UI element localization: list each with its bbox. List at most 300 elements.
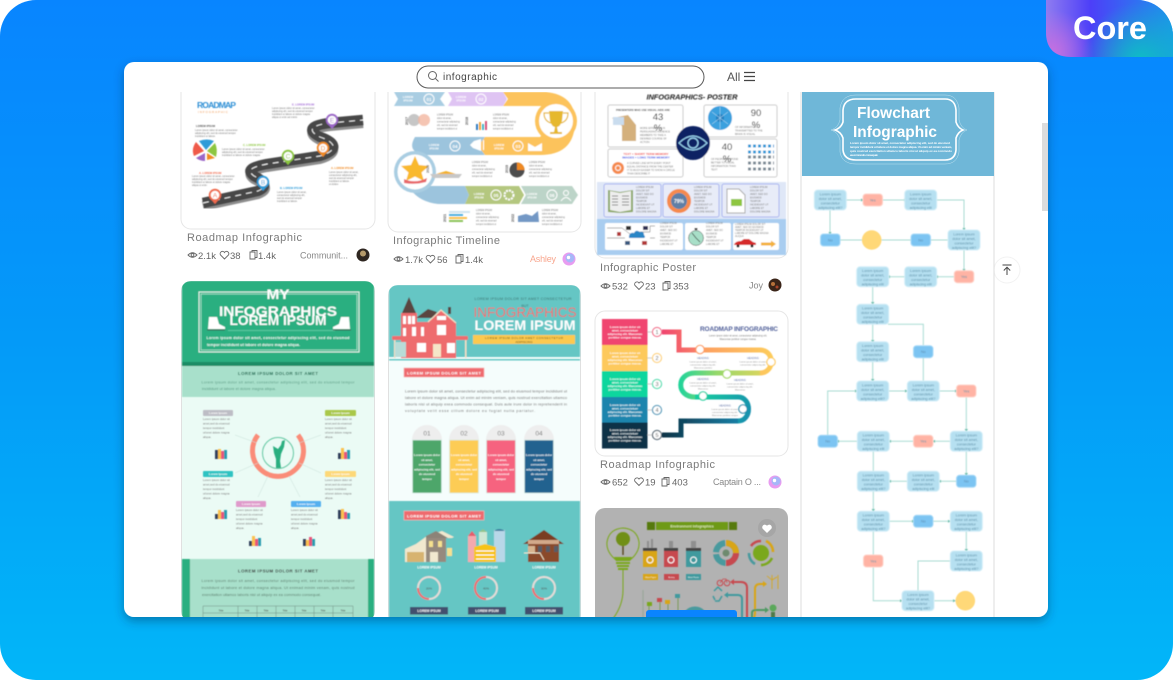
card: green skating infographic: MY <box>266 286 290 302</box>
card: Infographic Timeline: dolor sit amet, <box>437 117 452 120</box>
card: Roadmap Infographic road: E. LOREM IPSUM <box>292 102 315 106</box>
flowchart title frame: Flowchart <box>857 105 931 122</box>
flowchart diagram: consectetur <box>914 392 934 396</box>
flowchart diagram: Yes <box>920 440 926 444</box>
flowchart diagram: adipiscing elit <box>862 358 884 362</box>
card: teal house infographic: voluptate velit esse cillum dolore eu fugiat nulla pariatur. <box>405 409 535 413</box>
card caption: Roadmap Infographic stack: 19 <box>645 478 656 488</box>
card caption: Infographic Timeline: Ashley <box>530 254 556 264</box>
card: green skating infographic: amet,sed do eiusmod <box>325 422 352 426</box>
flowchart diagram: dolor sit amet, <box>862 478 885 482</box>
card: Infographic Poster <box>594 92 788 258</box>
card: teal house infographic: sit amet, <box>458 458 470 462</box>
card: Infographic Poster: LOREM IPSUM <box>660 222 677 225</box>
card: Infographic Poster: LABORE ET <box>636 207 651 210</box>
card: Infographic Timeline: elit, sed do eiusmod <box>437 124 458 127</box>
flowchart diagram: No <box>825 440 830 444</box>
card: green skating infographic: Lorem ipsum dolor sit amet, consectetur adipiscing elit, sed do eiusmod tempor <box>202 579 355 583</box>
card: Infographic Poster: EIUSMOD <box>636 196 648 200</box>
card: Roadmap Infographic stack: Lorem ipsum dolor sit amet, consectetur adipiscing elit. <box>709 334 767 338</box>
filter menu: All <box>727 70 755 84</box>
flowchart diagram: Lorem ipsum <box>913 474 934 478</box>
flowchart diagram: Lorem ipsum <box>956 434 977 438</box>
card: Infographic Poster: EIUSMOD <box>694 196 706 200</box>
card: green skating infographic: Lorem Ipsum <box>209 411 228 415</box>
card: Roadmap Infographic stack: amet, consectetuer <box>612 406 639 410</box>
card: Infographic Timeline: tempor incididunt ut <box>437 128 457 130</box>
card: Infographic Poster: DOLOR SIT <box>636 190 650 192</box>
card: Infographic Timeline: LOREM IPSUM <box>542 210 558 212</box>
card: Roadmap Infographic stack: amet, consectetuer <box>612 328 639 332</box>
card: Roadmap Infographic stack: adipiscing elit. Maecenas <box>608 358 643 362</box>
card: Roadmap Infographic road: incididunt ut labore <box>277 200 298 203</box>
card: Roadmap Infographic stack: consectetur adipiscing elit. <box>727 386 753 388</box>
card: Roadmap Infographic stack: Maecenas porttitor congue massa. <box>720 338 757 341</box>
card: Roadmap Infographic road: ROADMAP <box>197 100 236 110</box>
card: green skating infographic: amet,sed do eiusmod <box>236 512 263 516</box>
card caption: Roadmap Infographic: Communit... <box>300 250 348 260</box>
card: Roadmap Infographic stack: Lorem ipsum dolor sit amet, <box>712 408 739 411</box>
card: Roadmap Infographic stack: consectetur adipiscing elit. <box>740 364 766 366</box>
card: Infographic Timeline: LOREM <box>494 143 505 147</box>
card: green skating infographic: incididunt ut labore et dolore magna aliqua. <box>202 387 276 391</box>
card: green skating infographic: INFOGRAPHICS <box>219 303 337 319</box>
card: green skating infographic: Title <box>283 608 288 612</box>
card: Roadmap Infographic stack: adipiscing elit. Maecenas <box>608 435 643 439</box>
card: Infographic Poster: TEMPOR INCIDIDUNT UT <box>735 229 764 232</box>
card: teal house infographic: LOREM IPSUM <box>417 609 441 613</box>
card: Roadmap Infographic stack: Lorem ipsum dolor sit <box>610 351 640 355</box>
card: Infographic Poster: % <box>654 123 663 134</box>
flowchart diagram: Yes <box>963 389 969 393</box>
heart button <box>758 519 776 537</box>
card caption: Roadmap Infographic: Roadmap Infographic <box>187 232 302 244</box>
flowchart diagram: dolor sit amet, <box>906 598 930 602</box>
card: teal house infographic: do eiusmod <box>419 472 435 476</box>
card: Infographic Timeline: IPSUM <box>456 98 466 102</box>
card: Infographic Timeline <box>388 92 582 232</box>
flowchart diagram: adipiscing elit? <box>818 206 842 210</box>
flowchart title frame: Infographic <box>853 124 937 141</box>
card: Infographic Poster: OF PEOPLE RESPOND <box>711 158 738 161</box>
card: Infographic Poster: IMAGES = LONG TERM MEMORY <box>622 156 670 160</box>
card: teal house infographic: tempor <box>422 477 433 481</box>
card: Infographic Poster: MORE EFFECTIVE IN <box>640 127 665 130</box>
card: Infographic Poster: EIUSMOD <box>660 232 671 236</box>
card: green skating infographic: ut!onet dolore magna <box>236 522 263 526</box>
flowchart diagram: Lorem ipsum <box>910 269 931 273</box>
card: green skating infographic: tempor incididunt <box>203 426 225 430</box>
card caption: Infographic Poster: Infographic Poster <box>600 262 696 274</box>
card: Infographic Poster: DOLORE MAGNA <box>750 210 771 214</box>
card: green skating infographic: Lorem ipsum dolor sit <box>325 478 352 482</box>
card: teal house infographic: LOREM IPSUM <box>532 609 556 613</box>
card: Roadmap Infographic road: B <box>261 180 265 186</box>
card: Roadmap Infographic road: adipiscing elit, sed do eiusmod tempor <box>222 151 263 154</box>
card: Roadmap Infographic road: incididunt ut labore <box>195 135 216 138</box>
card: Infographic Timeline: dolor sit amet, <box>476 212 491 216</box>
card: Roadmap Infographic stack: adipiscing elit. Maecenas <box>608 384 643 388</box>
card: Infographic Timeline: IPSUM <box>429 146 439 150</box>
card: teal house infographic <box>388 285 580 626</box>
card: Infographic Poster: ACTION <box>640 141 650 144</box>
card: Infographic Timeline: 2019 <box>505 165 509 173</box>
flowchart title frame <box>831 95 967 164</box>
card: Roadmap Infographic stack: amet, consectetuer <box>612 380 639 384</box>
card caption: Infographic Poster: 23 <box>645 282 656 292</box>
card: Infographic Timeline: consectetur adipiscing <box>476 216 499 219</box>
card: green skating infographic: aliqua. <box>203 496 211 500</box>
card: Infographic Timeline: LOREM IPSUM <box>493 114 509 116</box>
card: teal house infographic: labore et dolore magna aliqua. Ut enim ad minim veniam, quis nostrud exercitation ullamco <box>405 396 567 400</box>
card: green skating infographic: aliqua. <box>325 435 333 439</box>
card: teal house infographic: LOREM IPSUM DOLOR AMET CONSECTETUR <box>485 336 564 340</box>
card: Infographic Poster: LABORE ET <box>750 207 765 210</box>
card: Infographic Poster: LOREM IPSUM DOLOR SIT <box>735 223 766 226</box>
card: Infographic Poster: INCIDIDUNT UT <box>694 204 713 206</box>
card caption: Roadmap Infographic: 1.4k <box>258 251 276 262</box>
flowchart diagram: Lorem ipsum <box>862 344 883 348</box>
card: Roadmap Infographic road: Lorem ipsum dolor sit amet, consectetur <box>272 107 315 110</box>
card: Infographic Poster: BETTER TO VISUAL <box>711 162 735 164</box>
card: Roadmap Infographic road: A <box>213 192 218 200</box>
card: Roadmap Infographic road: LOREM IPSUM <box>196 124 216 128</box>
card: Roadmap Infographic road: Lorem ipsum dolor sit amet, <box>329 171 359 174</box>
card: green skating infographic: ut!onet dolore magna <box>291 522 318 526</box>
card: teal house infographic: LOREM IPSUM <box>417 566 441 570</box>
flowchart diagram: adipiscing elit? <box>911 397 935 401</box>
card: Roadmap Infographic stack: Maecenas <box>735 390 746 392</box>
card: green skating infographic: exercitation ullamco laboris nisi ut aliquip ex ea commodo consequat. <box>202 593 321 597</box>
card: Roadmap Infographic road: A. LOREM IPSUM <box>199 171 222 175</box>
card: Infographic Poster: A CURVED LINE WITH EVERY POINT <box>627 162 671 165</box>
flowchart diagram: dolor sit amet, <box>912 478 935 482</box>
flowchart diagram: adipiscing elit? <box>861 527 885 531</box>
card: Infographic Timeline: 2018 <box>465 117 469 125</box>
card: Infographic Poster: EIUSMOD <box>706 232 717 236</box>
card: environment infographic hover <box>595 508 788 628</box>
card: Infographic Poster: LABORE ET <box>694 207 709 210</box>
card: Infographic Poster: AMET, SED DO <box>706 229 723 232</box>
card: Roadmap Infographic road: E <box>330 118 335 124</box>
card: green skating infographic: aliqua. <box>203 435 211 439</box>
card: Infographic Timeline: IPSUM <box>527 196 537 200</box>
card: Infographic Poster: INCIDIDUNT UT <box>660 240 678 242</box>
card: Roadmap Infographic stack: Lorem ipsum dolor sit amet, <box>726 382 754 386</box>
flowchart diagram: Lorem ipsum <box>956 553 977 557</box>
card: Roadmap Infographic road: consectetur adipiscing elit, <box>329 174 357 177</box>
card caption: Roadmap Infographic stack: 403 <box>672 478 688 488</box>
card: Infographic Timeline: dolor sit amet, <box>542 212 557 216</box>
card: Infographic Timeline: elit, sed do eiusmod <box>472 172 493 174</box>
card: green skating infographic: Title <box>341 608 346 612</box>
card: Infographic Timeline: LOREM <box>429 143 440 147</box>
card: green skating infographic: Lorem Ipsum <box>209 472 228 476</box>
card: teal house infographic: LOREM IPSUM <box>532 566 556 570</box>
card: green skating infographic: amet,sed do eiusmod <box>291 512 318 516</box>
card caption: Infographic Timeline: 1.4k <box>465 255 483 266</box>
card: Infographic Timeline: LOREM <box>403 95 414 99</box>
flowchart diagram: Lorem ipsum <box>863 514 884 518</box>
card: green skating infographic: Title <box>302 608 307 612</box>
card: Infographic Timeline: LOREM IPSUM <box>529 162 545 164</box>
card: Roadmap Infographic stack: Lorem ipsum dolor sit <box>610 403 640 407</box>
card: Infographic Timeline: LOREM IPSUM <box>437 114 453 116</box>
flowchart diagram: No <box>964 480 969 484</box>
flowchart diagram: consectetur <box>911 201 931 205</box>
card caption: Roadmap Infographic stack <box>600 459 782 488</box>
card: Roadmap Infographic road: sed do eiusmod tempor <box>329 177 354 180</box>
card: Roadmap Infographic stack: 1 <box>655 330 659 336</box>
flowchart diagram: No <box>828 238 833 242</box>
card: Infographic Poster: AMET, SED DO <box>660 229 677 232</box>
card: Infographic Timeline: IPSUM <box>403 98 413 102</box>
flowchart diagram: adipiscing elit <box>910 206 932 210</box>
card: green skating infographic: LOREM IPSUM DOLOR SIT AMET <box>238 371 318 376</box>
card: Infographic Poster: TEMPOR <box>750 200 761 203</box>
flowchart diagram: Yes <box>961 275 967 279</box>
card: green skating infographic: Lorem ipsum dolor sit amet, consectetur adipiscing elit, sed do eiusmod tempor <box>202 380 355 384</box>
card: Infographic Poster: EIUSMOD <box>750 196 762 200</box>
flowchart title frame: Lorem ipsum dolor sit amet, consectetur adipiscing elit, sed do eiusmod <box>850 141 950 145</box>
flowchart diagram: adipiscing elit? <box>952 246 976 250</box>
card: environment infographic hover: Battery <box>668 576 675 579</box>
card: green skating infographic: tempor incididunt <box>325 426 347 430</box>
card: Infographic Poster: DOLOR SIT <box>706 226 719 228</box>
card: Roadmap Infographic road: incididunt ut labore et dolore magna <box>272 113 311 116</box>
card: Infographic Poster: TEXT <box>711 168 718 172</box>
flowchart diagram: dolor sit amet, <box>862 518 885 522</box>
card: Infographic Poster: 79% <box>674 199 685 205</box>
card: Roadmap Infographic stack: HEADING <box>747 356 759 360</box>
card: Infographic Timeline: elit, sed do eiusmod <box>529 172 550 174</box>
card: Infographic Poster: DOLORE MAGNA <box>694 210 715 214</box>
flowchart diagram: consectetur <box>911 278 931 282</box>
card: Roadmap Infographic stack: Lorem ipsum dolor sit <box>610 377 640 381</box>
card: teal house infographic: do eiusmod <box>493 472 509 476</box>
card: Roadmap Infographic road: adipiscing elit, sed do eiusmod tempor <box>272 110 313 113</box>
flowchart diagram: No <box>921 350 926 354</box>
card: green skating infographic: ut!onet dolore magna <box>325 492 352 496</box>
card: green skating infographic: Title <box>264 608 269 612</box>
card: Infographic Poster: THAN DESCRIBE IT <box>627 172 651 176</box>
card: Roadmap Infographic stack: 3 <box>655 382 659 388</box>
card: Roadmap Infographic stack: porttitor congue massa. <box>609 438 642 442</box>
template gallery <box>181 70 994 630</box>
card: Roadmap Infographic stack: porttitor congue massa. <box>609 336 642 340</box>
card: Infographic Poster: 90 <box>751 108 761 119</box>
main window panel <box>124 62 1048 617</box>
flowchart diagram: consectetur <box>908 602 928 606</box>
card: Infographic Timeline: 2017 <box>405 117 409 125</box>
card: green skating infographic: Lorem Ipsum <box>297 502 316 506</box>
card: Infographic Poster: TEMPOR <box>694 200 705 203</box>
card: teal house infographic: consectetur <box>531 463 548 467</box>
flowchart diagram: Lorem ipsum <box>913 383 934 387</box>
scrollbar <box>1042 123 1048 211</box>
card: Infographic Timeline: consectetur adipiscing <box>529 168 552 171</box>
card: Roadmap Infographic road: C <box>286 154 291 160</box>
card: Infographic Timeline: 04 <box>452 144 458 149</box>
card: Roadmap Infographic road: A. LOREM IPSUM <box>331 166 354 170</box>
card: green skating infographic: aliqua. <box>325 496 333 500</box>
card caption: Roadmap Infographic: 38 <box>230 251 241 262</box>
card: Roadmap Infographic road: sed do eiusmod tempor <box>277 197 302 200</box>
card: Infographic Poster: LOREM IPSUM <box>694 186 712 189</box>
card: green skating infographic: ut!onet dolore magna <box>325 430 352 434</box>
card: Infographic Timeline: tempor incididunt ut <box>476 223 496 226</box>
card: teal house infographic: Lorem ipsum dolor <box>414 453 441 457</box>
card: Infographic Poster: DOLOR SIT <box>660 226 673 228</box>
card: Infographic Poster: 40 <box>722 142 732 153</box>
card: Infographic Timeline: 03 <box>515 144 521 149</box>
card: Infographic Poster: BRAIN IS VISUAL <box>735 133 756 136</box>
card: green skating infographic: ut!onet dolore magna <box>203 430 230 434</box>
card: Roadmap Infographic road: INFOGRAPHIC <box>198 110 229 114</box>
card: teal house infographic: adipiscing elit, sed <box>488 467 514 471</box>
filter menu: All: All <box>727 70 740 84</box>
card: Roadmap Infographic road: incididunt ut labore <box>329 180 350 183</box>
card: Roadmap Infographic stack: adipiscing elit. Maecenas <box>608 332 643 336</box>
flowchart diagram: dolor sit amet, <box>819 197 842 201</box>
card: green skating infographic: Title <box>321 608 326 612</box>
card: teal house infographic: Lorem ipsum dolor <box>526 453 553 457</box>
card: Roadmap Infographic stack: amet, consectetuer <box>612 432 639 436</box>
card: teal house infographic: 20% <box>426 586 432 590</box>
card: Infographic Timeline: 2021 <box>443 214 447 222</box>
card: teal house infographic: sit amet, <box>495 458 507 462</box>
card: teal house infographic: LOREM IPSUM <box>474 566 498 570</box>
card: green skating infographic: aliqua. <box>291 526 299 530</box>
flowchart diagram: consectetur <box>864 483 884 487</box>
card: Infographic Poster: DOLOR SIT <box>750 190 764 192</box>
card: teal house infographic: LOREM IPSUM <box>475 609 499 613</box>
card: Infographic Timeline: consectetur adipiscing <box>493 120 516 124</box>
card: Roadmap Infographic stack: 2 <box>655 356 659 362</box>
flowchart diagram: No <box>918 238 923 242</box>
card: Infographic Poster: LABORE ET DOLORE MAGNA <box>735 232 769 235</box>
flowchart diagram: consectetur <box>914 483 934 487</box>
card: Infographic Poster: TEMPOR <box>636 200 647 203</box>
card: green skating infographic: tempor incididunt <box>325 487 347 491</box>
flowchart diagram: Lorem ipsum <box>956 514 977 518</box>
card: Infographic Poster: INCIDIDUNT UT <box>636 204 655 206</box>
card: teal house infographic: 40% <box>483 586 489 590</box>
card: teal house infographic: laboris nisi ut aliquip exea commodo consequat. Duis aute irure dolor in reprehenderit in <box>405 402 567 406</box>
card: Infographic Poster: MEMBERS TO TAKE A <box>640 134 666 137</box>
card: Infographic Timeline: consectetur adipiscing <box>542 216 565 219</box>
card: teal house infographic: LOREM IPSUM DOLOR SIT AMET <box>407 370 482 376</box>
card: Infographic Timeline: 01 <box>426 97 432 102</box>
flowchart title frame: quis nostrud exercitation ullamco laboris nisi ut aliquip ex ea commodo <box>850 149 952 153</box>
card: Roadmap Infographic stack <box>595 311 788 456</box>
flowchart diagram: adipiscing elit <box>862 447 884 451</box>
card: Infographic Timeline: 2020 <box>426 165 430 173</box>
card: Infographic Poster: TEMPOR <box>706 236 717 239</box>
flowchart diagram: dolor sit amet, <box>861 311 884 315</box>
card: Infographic Timeline: LOREM IPSUM <box>476 210 492 212</box>
flowchart diagram: dolor sit amet, <box>861 348 884 352</box>
card: teal house infographic: tempor <box>459 477 470 481</box>
flowchart diagram: Lorem ipsum <box>862 269 883 273</box>
card: green skating infographic: Title <box>219 608 224 612</box>
card: Roadmap Infographic stack: Maecenas <box>698 388 709 390</box>
card: green skating infographic: Lorem ipsum dolor sit <box>291 508 318 512</box>
flowchart diagram: Lorem ipsum <box>863 434 884 438</box>
card: teal house infographic: adipiscing elit, sed <box>526 467 552 471</box>
card: Infographic Poster: % <box>752 120 761 131</box>
flowchart diagram: dolor sit amet, <box>952 237 976 241</box>
use template button <box>646 610 737 617</box>
flowchart diagram: adipiscing elit? <box>954 527 978 531</box>
flowchart diagram: adipiscing elit? <box>906 606 930 610</box>
card: teal house infographic: sit amet, <box>533 458 545 462</box>
card: Roadmap Infographic stack: porttitor congue massa. <box>609 414 642 418</box>
flowchart diagram: consectetur <box>821 201 841 205</box>
flowchart diagram: dolor sit amet, <box>912 388 935 392</box>
card: Infographic Timeline: tempor incididunt ut <box>472 175 492 178</box>
flowchart diagram: consectetur <box>957 443 977 447</box>
card: Roadmap Infographic road: adipiscing elit, sed do eiusmod tempor <box>192 178 233 181</box>
card: Roadmap Infographic stack: Lorem ipsum dolor sit <box>610 325 640 329</box>
flowchart diagram: consectetur <box>864 443 884 447</box>
card: Roadmap Infographic stack: HEADING <box>697 377 709 381</box>
card: Infographic Timeline: LOREM <box>527 192 538 196</box>
card: Roadmap Infographic stack: Lorem ipsum dolor sit amet, <box>690 360 717 364</box>
search bar: infographic <box>443 72 497 83</box>
card: Infographic Timeline: elit, sed do eiusmod <box>542 220 563 222</box>
card: Infographic Timeline: dolor sit amet, <box>529 164 544 168</box>
flowchart title frame: ea commodo consequat. <box>850 153 878 157</box>
card: Roadmap Infographic road: consectetur adipiscing elit, <box>277 194 305 197</box>
card: teal house infographic: 02 <box>460 430 468 438</box>
card caption: Roadmap Infographic stack: Roadmap Infographic <box>600 459 716 471</box>
card: Infographic Poster: OF INFORMATION <box>735 126 757 129</box>
card: green skating infographic: ut!onet dolore magna <box>203 492 230 496</box>
flowchart diagram: Yes <box>870 198 876 202</box>
card: teal house infographic: ADIPISCING <box>515 340 533 344</box>
flowchart diagram: Lorem ipsum <box>953 232 975 236</box>
card: green skating infographic: incididunt ut labore et dolore magna aliqua. Ut enimad minim venam, quis nostrud <box>202 586 354 590</box>
flowchart diagram: Lorem ipsum <box>820 192 841 196</box>
flowchart diagram: adipiscing elit? <box>861 487 885 491</box>
flowchart diagram: consectetur <box>863 392 883 396</box>
card: green skating infographic <box>182 281 374 624</box>
card: Roadmap Infographic road: incididunt ut labore et dolore magna <box>192 181 231 184</box>
flowchart diagram: adipiscing elit <box>910 282 932 286</box>
card: Infographic Poster: TEMPOR <box>660 236 671 239</box>
card: Roadmap Infographic road: et dolore <box>329 183 339 186</box>
card: Roadmap Infographic stack: Lorem ipsum dolor sit amet, <box>740 360 767 364</box>
card: Infographic Poster: PERSUADING AUDIENCE <box>640 130 670 134</box>
flowchart diagram: Lorem ipsum <box>910 192 931 196</box>
card: teal house infographic: 04 <box>535 430 543 438</box>
flowchart diagram: Yes <box>870 559 876 563</box>
card: Infographic Poster: PRESENTERS WHO USE VISUAL AIDS ARE <box>616 108 670 112</box>
card: teal house infographic: do eiusmod <box>456 472 472 476</box>
card: Roadmap Infographic stack: Maecenas porttitor <box>694 366 712 370</box>
card: Infographic Timeline: IPSUM <box>494 146 504 150</box>
card: Infographic Timeline: elit, sed do eiusmod <box>476 220 497 222</box>
flowchart diagram: dolor sit amet, <box>861 274 884 278</box>
card: Infographic Timeline: consectetur adipiscing <box>472 168 495 171</box>
card: Infographic Poster: DESIRED COURSE OF <box>640 138 667 140</box>
card: Infographic Timeline: 02 <box>478 97 484 102</box>
card: Infographic Timeline: LOREM IPSUM <box>472 162 488 164</box>
card: green skating infographic: tempor incididunt <box>291 517 313 521</box>
card: Infographic Timeline: consectetur adipiscing <box>437 120 460 124</box>
card: Roadmap Infographic stack: Lorem ipsum dolor sit amet, <box>690 382 717 384</box>
